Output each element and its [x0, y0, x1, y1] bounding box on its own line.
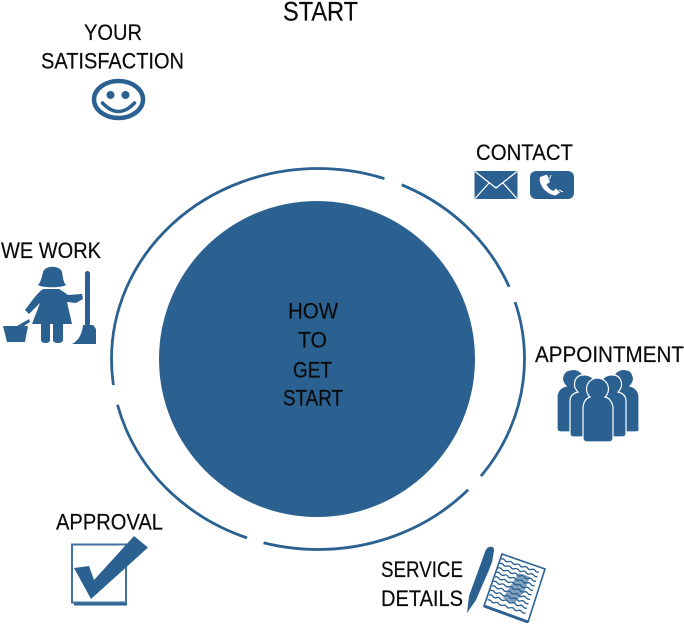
- icon: smiley: [94, 81, 143, 118]
- icon: cleaner with broom and bucket: [3, 267, 96, 344]
- icon: pen: [467, 547, 494, 613]
- label: your satisfaction: YOUR: [84, 20, 142, 45]
- label: contact: CONTACT: [476, 140, 573, 165]
- icon: telephone: [530, 171, 574, 199]
- icon: envelope: [474, 171, 518, 199]
- label: your satisfaction: SATISFACTION: [41, 48, 184, 74]
- center text: GET: [293, 358, 332, 382]
- center text: START: [283, 386, 343, 410]
- icon: group of people: [557, 369, 639, 442]
- center text: HOW: [288, 298, 339, 324]
- label: we work: WE WORK: [1, 238, 101, 263]
- center text: TO: [298, 328, 327, 352]
- label: service details: SERVICE: [381, 557, 463, 582]
- label: approval: APPROVAL: [56, 510, 163, 534]
- icon: notepad: [484, 554, 545, 622]
- label: service details: DETAILS: [381, 586, 463, 611]
- label: your satisfaction: [41, 20, 184, 74]
- outer ring: [106, 168, 524, 550]
- central circle: [159, 201, 475, 517]
- icon: checkbox with tick: [72, 536, 148, 604]
- label: service details: [381, 557, 463, 611]
- center text: [283, 298, 343, 410]
